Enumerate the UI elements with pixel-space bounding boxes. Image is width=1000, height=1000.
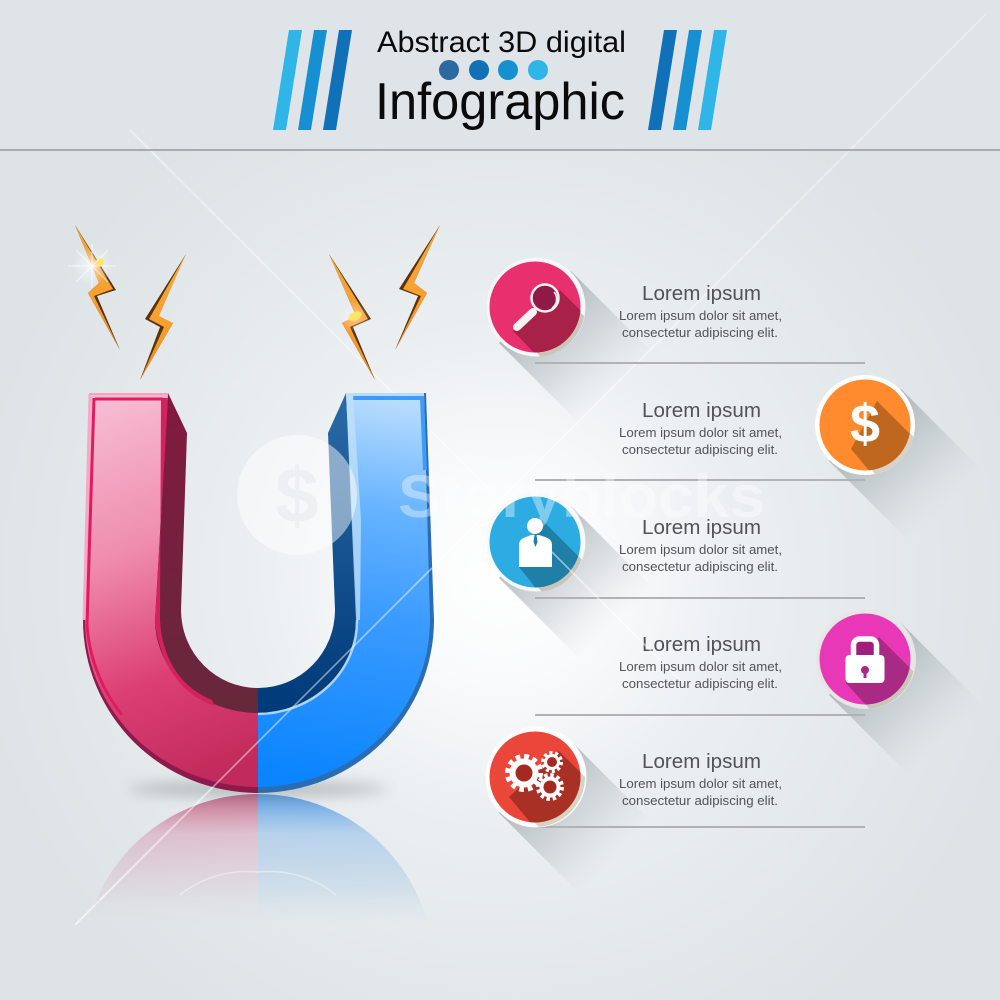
magnet left arm [83, 393, 258, 793]
text block 1: Lorem ipsum [642, 283, 761, 305]
long shadow: lock [829, 623, 983, 777]
text block 1: consectetur adipiscing elit. [622, 325, 778, 340]
icon badge: dollar [815, 375, 915, 475]
magnet right arm [258, 393, 434, 793]
icon badge: gears [486, 726, 586, 828]
icon badge: person [490, 496, 586, 592]
text block 5 [619, 751, 782, 808]
text block 4: Lorem ipsum dolor sit amet, [619, 659, 782, 674]
text block 5: consectetur adipiscing elit. [622, 793, 778, 808]
overlay: stock watermark: Storyblocks [398, 463, 765, 530]
header stripes: right [648, 30, 727, 130]
text block 4: Lorem ipsum [642, 634, 761, 656]
icon badge: magnifier [486, 258, 586, 356]
text block 5: Lorem ipsum [642, 751, 761, 773]
magnet ground shadow [128, 782, 388, 796]
long shadow: person [499, 506, 653, 660]
magnet inner side: pink [150, 393, 258, 716]
rule lines [535, 362, 865, 828]
long shadow: magnifier [499, 271, 653, 425]
text block 4: consectetur adipiscing elit. [622, 676, 778, 691]
long shadow: dollar [829, 389, 983, 543]
text block 2: Lorem ipsum [642, 400, 761, 422]
header stripes: left [273, 30, 352, 130]
text block 5: Lorem ipsum dolor sit amet, [619, 776, 782, 791]
horseshoe magnet [83, 393, 434, 793]
magnet inner side: blue [258, 393, 365, 716]
text block 2: consectetur adipiscing elit. [622, 442, 778, 457]
text block 2: Lorem ipsum dolor sit amet, [619, 425, 782, 440]
lightning bolts [68, 225, 440, 380]
overlay: stock watermark: $ [275, 451, 319, 539]
text block 1: Lorem ipsum dolor sit amet, [619, 308, 782, 323]
icon badge: dollar: $ [850, 394, 880, 454]
title dots [439, 60, 548, 80]
icon badge: lock [816, 609, 916, 709]
title line 2: Infographic [375, 73, 625, 131]
text block 3: Lorem ipsum dolor sit amet, [619, 542, 782, 557]
text block 1 [619, 283, 782, 340]
header divider [0, 149, 1000, 151]
title line 1: Abstract 3D digital [377, 26, 626, 59]
magnet reflection [83, 794, 433, 966]
text block 3: consectetur adipiscing elit. [622, 559, 778, 574]
text block 3 [619, 517, 782, 574]
overlay: stock watermark [237, 435, 765, 555]
overlay: light streaks [100, 552, 660, 900]
text block 4 [619, 634, 782, 691]
text block 3: Lorem ipsum [642, 517, 761, 539]
text block 2 [619, 400, 782, 457]
long shadow: gears [499, 741, 653, 895]
